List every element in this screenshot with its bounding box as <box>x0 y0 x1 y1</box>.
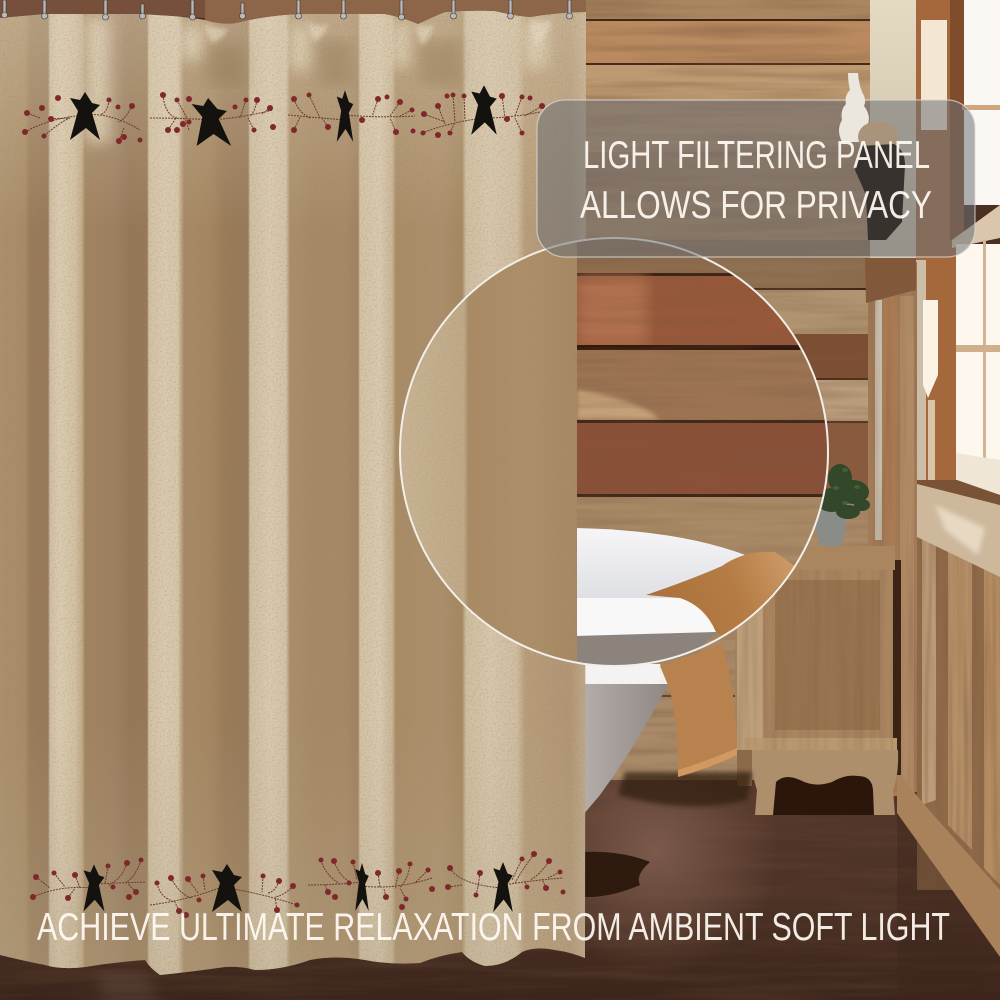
bathtub bowl <box>583 684 668 815</box>
floor reflection under curtain <box>95 972 160 1000</box>
bottom embroidered vines <box>33 854 563 911</box>
lower wooden boards <box>868 262 917 792</box>
cream column <box>870 0 916 262</box>
wainscot planks <box>922 535 936 805</box>
right column and window wall <box>865 0 1000 890</box>
lower window panes <box>956 244 1000 490</box>
top shadow patches <box>205 40 460 85</box>
wood window frame <box>916 0 957 490</box>
bathtub rim <box>583 664 668 684</box>
upper window panes <box>964 0 1000 205</box>
floor sunlight patch <box>530 720 830 980</box>
round ornament on shelf <box>858 121 898 153</box>
zoomed wood planks <box>577 239 827 606</box>
floor <box>0 770 1000 1000</box>
zoomed fabric <box>395 230 577 675</box>
top primitive stars <box>70 85 497 146</box>
zoomed towel <box>646 552 796 640</box>
floor shadow of tub <box>583 852 650 897</box>
translucent panel <box>537 73 975 257</box>
magnifier circle detail <box>395 230 835 676</box>
shower curtain hooks <box>2 0 572 20</box>
zoomed bathtub <box>575 528 748 670</box>
pleat scoops under hooks <box>205 20 552 46</box>
cabinet <box>735 546 901 815</box>
spiral vase on shelf <box>839 73 870 142</box>
wood wall planks <box>575 0 871 780</box>
top light patches <box>85 18 547 143</box>
zoomed cabinet corner <box>762 592 774 605</box>
floor shadow under tub <box>618 772 752 806</box>
top embroidered vines <box>25 95 542 141</box>
floor edge wedge <box>897 813 1000 1000</box>
hanging towel <box>660 644 737 777</box>
bottom berries <box>30 851 566 918</box>
dark towel on shelf <box>855 144 905 240</box>
top berries <box>22 92 545 144</box>
window sill <box>917 482 1000 577</box>
cabinet gap under apron <box>770 765 876 815</box>
baseboard <box>897 770 1000 957</box>
cabinet legs <box>752 750 898 815</box>
plant on cabinet <box>812 464 870 546</box>
curtain rod band <box>0 0 586 24</box>
panel heading <box>580 134 932 227</box>
bottom primitive stars <box>84 862 513 912</box>
curtain <box>0 0 590 985</box>
